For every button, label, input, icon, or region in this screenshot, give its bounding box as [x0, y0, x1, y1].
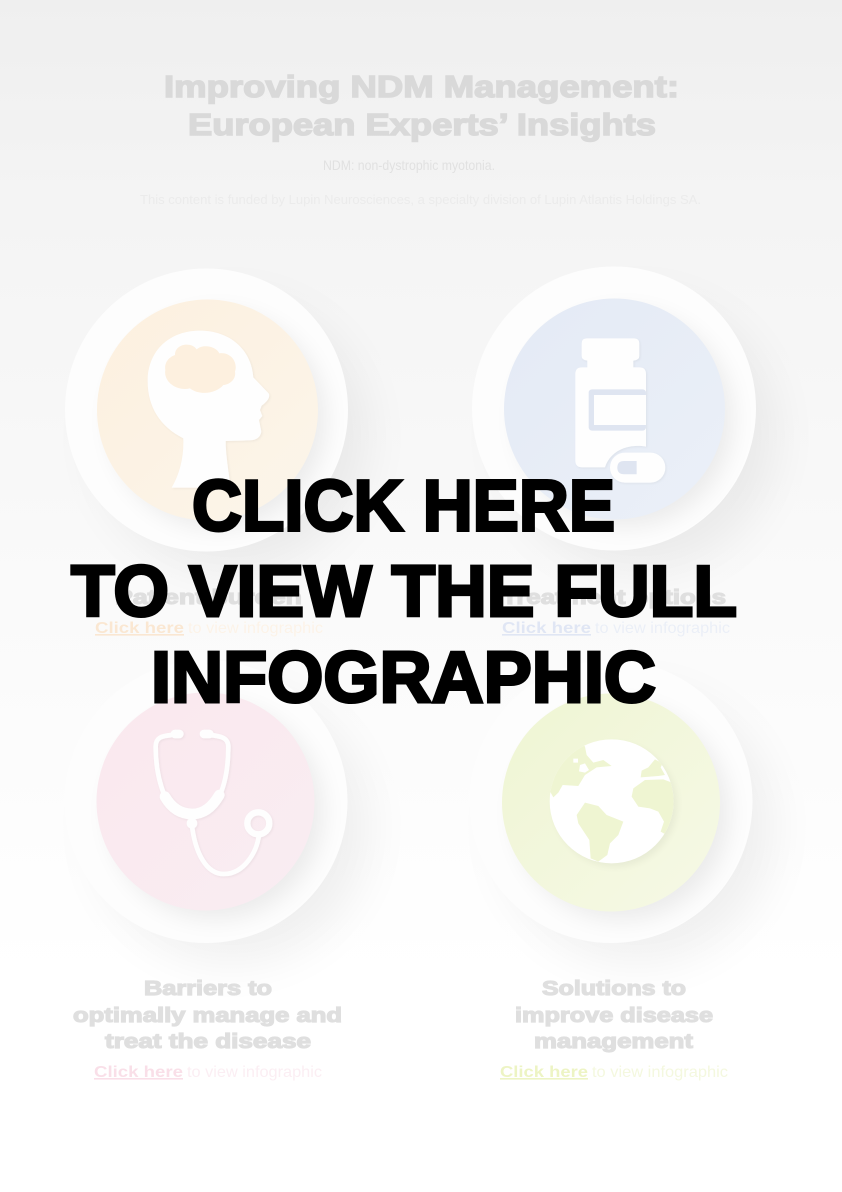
overlay call to action: TO VIEW THE FULL	[71, 552, 737, 632]
label: barriers	[73, 978, 342, 1053]
continent: Europe	[641, 759, 665, 777]
label: solutions: improve disease	[515, 1005, 713, 1027]
link: barriers: Click here	[94, 1064, 183, 1081]
link: patient burden: Click here	[95, 620, 184, 637]
link: solutions: Click here	[500, 1064, 588, 1081]
label: solutions: Solutions to	[542, 978, 686, 1000]
link: barriers: to view infographic	[187, 1064, 322, 1081]
panel: patient burden	[65, 268, 367, 571]
link: treatment options	[502, 620, 730, 637]
title	[164, 69, 679, 142]
link: solutions: to view infographic	[592, 1064, 728, 1081]
overlay call to action: CLICK HERE	[192, 466, 615, 546]
label: solutions	[515, 978, 713, 1053]
panel: solutions	[502, 694, 766, 957]
panel: treatment options	[472, 266, 775, 570]
title: European Experts’ Insights	[188, 107, 656, 142]
label: barriers: treat the disease	[105, 1031, 311, 1053]
icon: pill bottle and capsule	[575, 338, 665, 483]
continent: North America	[550, 746, 612, 798]
link: treatment options: Click here	[502, 620, 591, 637]
continent: South America	[577, 803, 623, 862]
label: patient burden: Patient burden	[115, 587, 302, 609]
link: patient burden	[95, 620, 323, 637]
link: patient burden: to view infographic	[188, 620, 323, 637]
label: barriers: optimally manage and	[73, 1005, 342, 1027]
label: treatment options: Treatment options	[502, 587, 726, 609]
link: barriers	[94, 1064, 322, 1081]
icon: globe	[550, 740, 675, 864]
funding statement: This content is funded by Lupin Neurosciences, a specialty division of Lupin Atlantis Holdings SA.	[140, 192, 701, 207]
continent: Africa	[632, 779, 675, 835]
panel: barriers	[64, 660, 367, 963]
label: barriers: Barriers to	[144, 978, 272, 1000]
overlay call to action	[71, 466, 737, 718]
abbreviation note: NDM: non-dystrophic myotonia.	[323, 157, 495, 173]
title: Improving NDM Management:	[164, 69, 679, 104]
overlay call to action: INFOGRAPHIC	[151, 638, 656, 718]
link: treatment options: to view infographic	[595, 620, 730, 637]
label: solutions: management	[534, 1031, 693, 1053]
icon: stethoscope	[156, 734, 269, 874]
link: solutions	[500, 1064, 728, 1081]
icon: head with brain	[148, 331, 269, 488]
